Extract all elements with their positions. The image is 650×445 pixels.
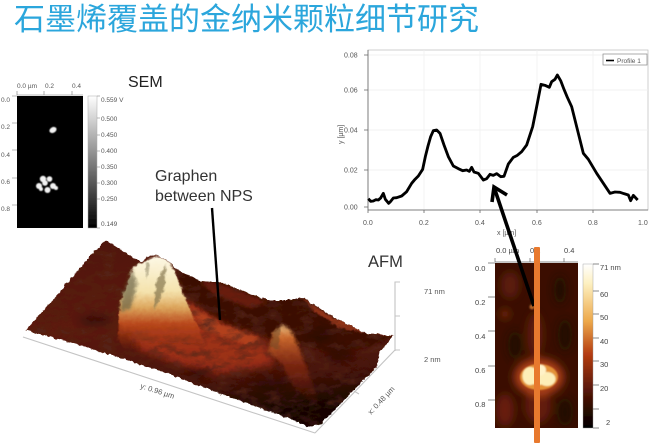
SEM colour scale: 0.350 — [101, 164, 118, 171]
3D axis labels — [139, 287, 445, 416]
Profile line chart — [338, 50, 648, 237]
legend — [603, 54, 647, 65]
AFM colour scale — [583, 263, 621, 428]
AFM colour scale: 60 — [600, 290, 608, 299]
SEM axes labels: 0.8 — [1, 206, 10, 213]
AFM colour scale: 30 — [600, 360, 608, 369]
SEM colour scale — [88, 96, 124, 228]
AFM axis labels — [475, 246, 578, 409]
3D axis labels: y: 0.96 µm — [139, 381, 176, 401]
SEM colour scale: 0.450 — [101, 132, 118, 139]
AFM axis labels: 0.8 — [475, 400, 485, 409]
AFM colour scale: 71 nm — [600, 263, 621, 272]
SEM colour scale: 0.300 — [101, 180, 118, 187]
surface relief — [20, 235, 400, 431]
AFM axis labels: 0.2 — [475, 298, 485, 307]
3D AFM surface — [20, 235, 445, 433]
chart tick labels: 0.00 — [344, 204, 358, 212]
3D axis labels: x: 0.48 µm — [366, 385, 396, 416]
SEM colour scale: 0.400 — [101, 148, 118, 155]
AFM axis labels: 0.2 — [530, 246, 540, 255]
AFM axis labels: 0.4 — [475, 332, 485, 341]
chart tick labels: x [µm] — [497, 230, 516, 237]
chart tick labels: 0.2 — [419, 220, 429, 227]
SEM colour scale: 0.149 — [101, 221, 118, 228]
AFM colour scale: 50 — [600, 313, 608, 322]
SEM axes labels: 0.6 — [1, 179, 10, 186]
AFM heat map — [495, 263, 578, 428]
chart tick labels: 0.08 — [344, 52, 358, 60]
chart tick labels: 0.06 — [344, 88, 358, 94]
SEM label: SEM — [128, 74, 163, 91]
AFM colour scale: 40 — [600, 337, 608, 346]
3D axis labels: 71 nm — [424, 287, 445, 296]
chart tick labels: 0.04 — [344, 128, 358, 134]
chart frame and grid — [368, 50, 648, 210]
chart tick labels: 0.8 — [588, 220, 598, 227]
panel: AFM map — [475, 246, 621, 428]
SEM colour scale: 0.250 — [101, 196, 118, 203]
AFM axis labels: 0.0 µm — [496, 246, 519, 255]
chart tick labels: 0.02 — [344, 168, 358, 174]
chart tick labels: 0.6 — [532, 220, 542, 227]
SEM colour scale: 0.500 — [101, 116, 118, 123]
chart tick labels: y [µm] — [338, 125, 345, 144]
legend: Profile 1 — [617, 58, 641, 65]
SEM colour scale: 0.559 V — [101, 97, 124, 104]
SEM axes labels: 0.4 — [72, 83, 81, 90]
large gold peak — [118, 256, 208, 355]
SEM micrograph — [17, 96, 83, 228]
arrow: Graphen label to ridge — [212, 208, 220, 320]
AFM colour scale: 20 — [600, 384, 608, 393]
AFM axis labels: 0.0 — [475, 264, 485, 273]
SEM axes labels: 0.0 — [1, 97, 10, 104]
3D axes — [23, 282, 400, 433]
AFM colour scale: 2 — [606, 418, 610, 427]
chart tick labels: 0.0 — [363, 220, 373, 227]
profile curve — [368, 75, 638, 203]
chart tick labels: 0.4 — [475, 220, 485, 227]
SEM axes labels: 0.2 — [45, 83, 54, 90]
AFM label: AFM — [368, 253, 403, 271]
SEM axes labels: 0.2 — [1, 124, 10, 131]
orange scan line — [534, 247, 540, 443]
SEM axes labels: 0.4 — [1, 152, 10, 159]
Graphen label: between NPS — [155, 188, 253, 205]
Graphen label: Graphen — [155, 168, 217, 185]
SEM axes labels — [1, 83, 83, 213]
AFM axis labels: 0.4 — [564, 246, 574, 255]
chart tick labels: 1.0 — [638, 220, 648, 227]
title: 石墨烯覆盖的金纳米颗粒细节研究 — [14, 2, 479, 37]
chart axes — [364, 50, 648, 213]
small peak — [266, 322, 316, 402]
panel: SEM image — [1, 83, 124, 228]
chart tick labels — [338, 52, 648, 237]
3D axis labels: 2 nm — [424, 355, 441, 364]
AFM axis labels: 0.6 — [475, 366, 485, 375]
SEM axes labels: 0.0 µm — [17, 83, 37, 90]
arrow: profile to AFM map — [492, 187, 534, 306]
